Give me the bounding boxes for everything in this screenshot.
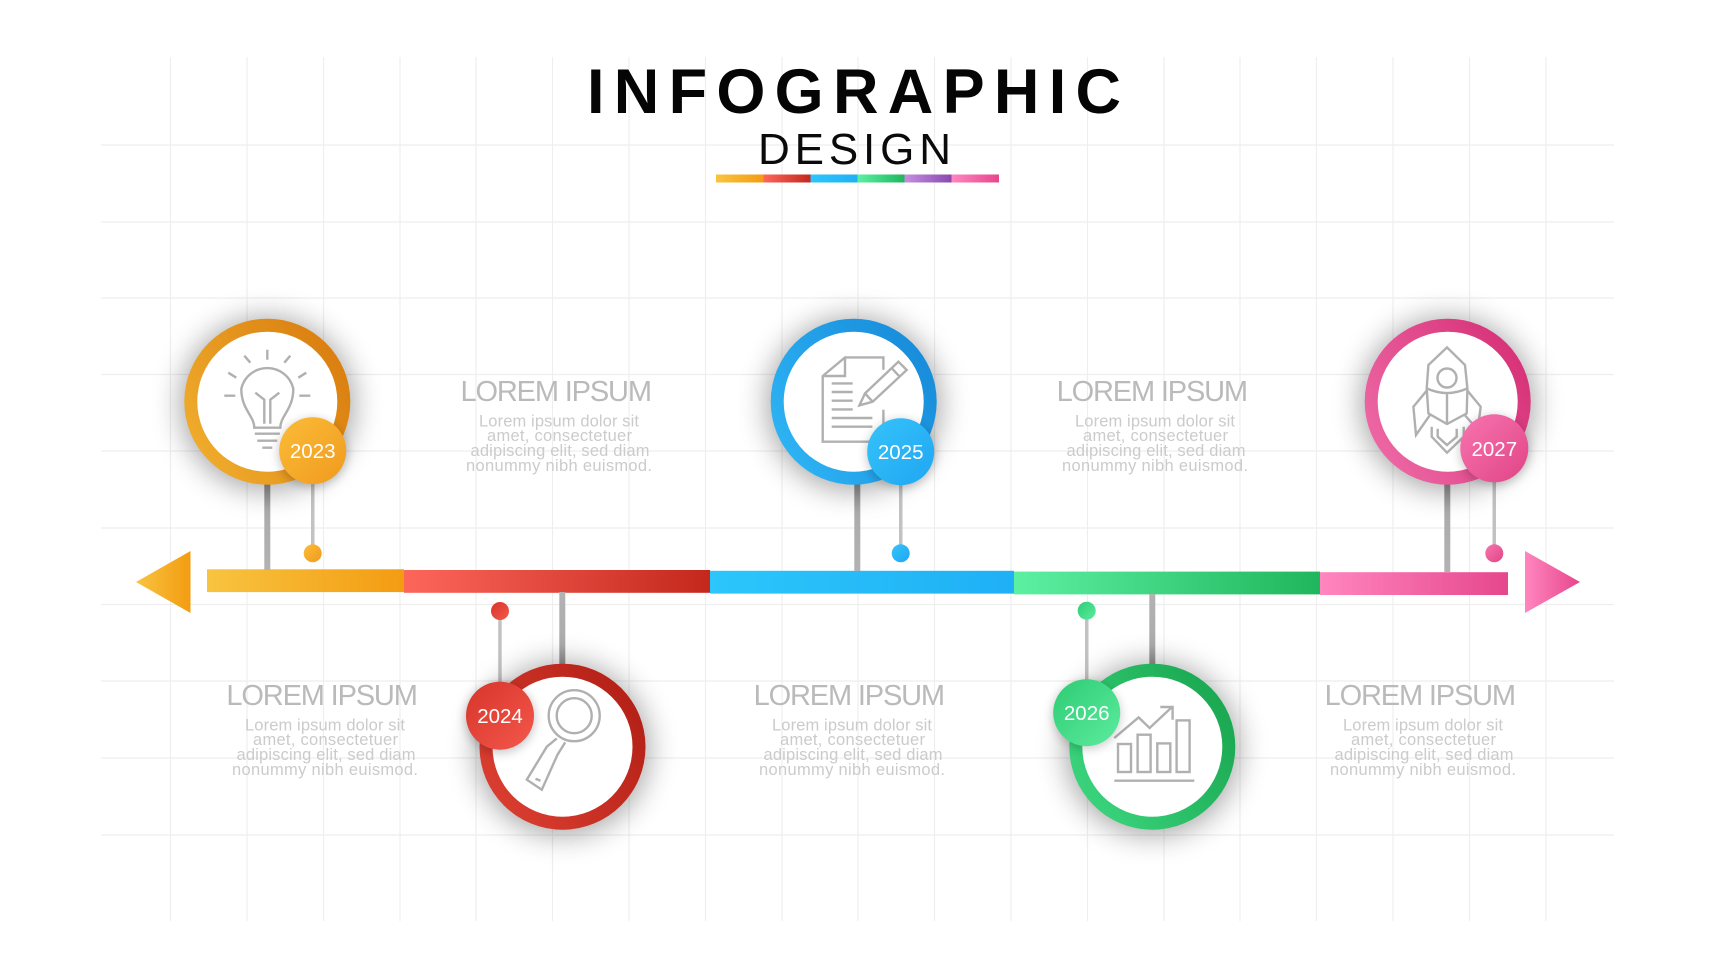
text block: bottom left <box>226 680 418 779</box>
icon: magnifying glass <box>527 690 600 790</box>
text block: top right <box>1057 376 1248 475</box>
icon: light bulb <box>224 350 310 448</box>
text block: bottom centre: Lorem ipsum dolor sit <box>772 716 932 734</box>
step: 2026 <box>1053 594 1238 835</box>
title colour bar <box>716 174 999 182</box>
text block: top left: nonummy nibh euismod. <box>466 457 652 475</box>
text block: bottom centre: nonummy nibh euismod. <box>759 761 945 779</box>
year badge <box>1053 679 1120 746</box>
year label: 2023 <box>290 440 336 463</box>
icon: bar chart with arrow <box>1114 707 1194 781</box>
text block: bottom centre: adipiscing elit, sed diam <box>764 746 942 764</box>
text block: bottom left: LOREM IPSUM <box>226 680 418 712</box>
text block: bottom centre <box>754 680 945 779</box>
text block: top right: Lorem ipsum dolor sit <box>1075 412 1235 430</box>
year label: 2025 <box>878 441 924 464</box>
text block: top left <box>460 376 652 475</box>
arrow: right <box>1525 551 1580 613</box>
arrow: left <box>136 551 190 613</box>
text block: top left: amet, consectetuer <box>487 427 632 445</box>
step: 2025 <box>768 318 940 571</box>
year badge <box>279 417 346 484</box>
text block: bottom right: amet, consectetuer <box>1351 731 1496 749</box>
text block: bottom right: nonummy nibh euismod. <box>1330 761 1516 779</box>
text block: top right: nonummy nibh euismod. <box>1062 457 1248 475</box>
step: 2023 <box>181 318 353 570</box>
title: INFOGRAPHIC <box>587 57 1121 127</box>
text block: top right: LOREM IPSUM <box>1057 376 1248 408</box>
step: 2024 <box>465 592 648 835</box>
text block: top left: adipiscing elit, sed diam <box>470 442 650 460</box>
year label: 2026 <box>1064 702 1110 725</box>
text block: bottom right: LOREM IPSUM <box>1325 680 1516 712</box>
text block: top left: Lorem ipsum dolor sit <box>479 412 639 430</box>
text block: bottom right: adipiscing elit, sed diam <box>1334 746 1514 764</box>
text block: bottom left: nonummy nibh euismod. <box>232 761 418 779</box>
text block: bottom left: adipiscing elit, sed diam <box>236 746 416 764</box>
icon: rocket <box>1413 347 1481 453</box>
background grid <box>101 57 1614 921</box>
year label: 2024 <box>477 705 523 728</box>
text block: bottom centre: LOREM IPSUM <box>754 680 945 712</box>
text block: top left: LOREM IPSUM <box>460 376 652 408</box>
text block: bottom left: Lorem ipsum dolor sit <box>245 716 405 734</box>
year label: 2027 <box>1471 438 1517 461</box>
text block: bottom right <box>1325 680 1516 779</box>
text block: top right: adipiscing elit, sed diam <box>1066 442 1246 460</box>
text block: bottom right: Lorem ipsum dolor sit <box>1343 716 1503 734</box>
subtitle: DESIGN <box>758 125 951 174</box>
year badge <box>466 682 534 750</box>
year badge <box>867 418 934 485</box>
text block: bottom centre: amet, consectetuer <box>780 731 926 749</box>
step: 2027 <box>1362 318 1534 572</box>
text block: top right: amet, consectetuer <box>1083 427 1228 445</box>
icon: document and pencil <box>823 357 907 442</box>
timeline bar <box>207 569 1508 595</box>
year badge <box>1460 414 1528 482</box>
text block: bottom left: amet, consectetuer <box>253 731 398 749</box>
